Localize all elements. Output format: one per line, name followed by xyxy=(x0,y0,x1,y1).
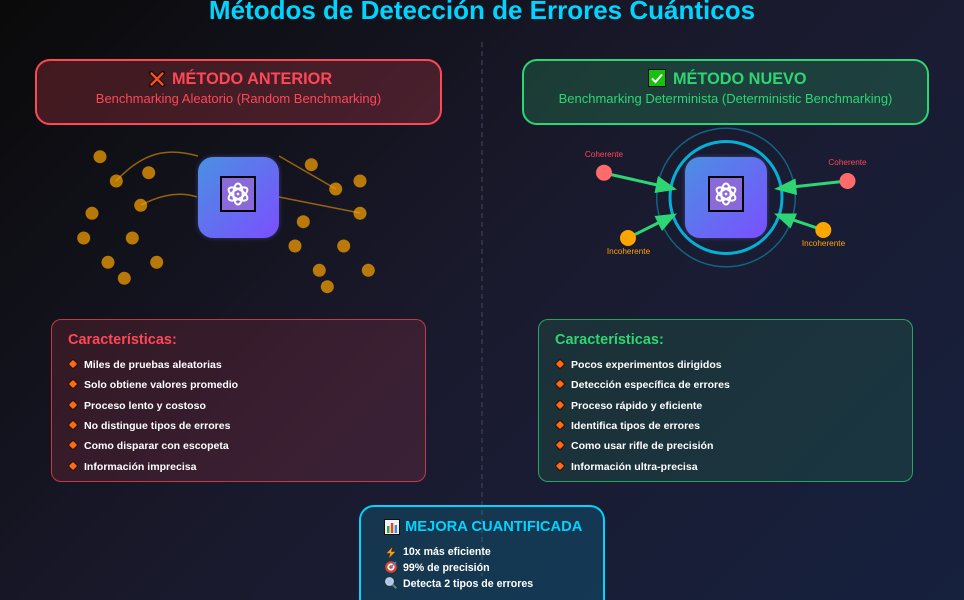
stat: error types: Detecta 2 tipos de errores xyxy=(403,578,533,590)
incoherent error, right xyxy=(802,222,846,248)
outer ring xyxy=(657,128,795,267)
stat: precision: 99% de precisión xyxy=(403,562,490,574)
diagram: rings around the chip xyxy=(656,128,796,268)
stat: efficiency xyxy=(386,546,491,560)
icon: atom xyxy=(220,176,256,212)
diagram: targeted error probes xyxy=(585,150,867,256)
panel: new method characteristics xyxy=(538,319,913,482)
old method subtitle: Benchmarking Aleatorio (Random Benchmarking) xyxy=(96,91,381,106)
coherent error, left: Coherente xyxy=(585,150,624,159)
arrows xyxy=(604,173,847,238)
icon: bar chart xyxy=(384,519,400,535)
icon: magnifier xyxy=(385,577,397,589)
coherent error, left xyxy=(585,150,624,181)
icon: quantum chip, new method xyxy=(685,156,766,238)
list item: Miles de pruebas aleatorias xyxy=(84,358,222,370)
icon: cross xyxy=(148,70,166,88)
new method subtitle: Benchmarking Determinista (Deterministic Benchmarking) xyxy=(559,91,892,106)
panel: old method characteristics xyxy=(51,319,426,482)
characteristics heading: Características: xyxy=(68,332,177,348)
list item: Información ultra-precisa xyxy=(571,460,698,472)
random paths xyxy=(116,152,360,213)
incoherent error, left: Incoherente xyxy=(607,247,651,256)
inner ring xyxy=(670,142,782,254)
list item: Pocos experimentos dirigidos xyxy=(571,358,722,370)
diagram: random benchmarking xyxy=(77,150,375,294)
incoherent error, right: Incoherente xyxy=(802,239,846,248)
list item: Solo obtiene valores promedio xyxy=(84,378,238,390)
list item: Proceso lento y costoso xyxy=(84,400,206,412)
improvement heading: MEJORA CUANTIFICADA xyxy=(405,518,582,534)
stat: efficiency: 10x más eficiente xyxy=(403,546,491,558)
coherent error, right: Coherente xyxy=(828,158,867,167)
icon: quantum chip, old method xyxy=(198,156,279,238)
coherent error, right xyxy=(828,158,867,189)
new method heading: MÉTODO NUEVO xyxy=(673,70,807,88)
list item: No distingue tipos de errores xyxy=(84,420,231,432)
list item: Como usar rifle de precisión xyxy=(571,440,713,452)
icon: check mark xyxy=(648,69,666,87)
incoherent error, left xyxy=(607,230,651,256)
list item: Información imprecisa xyxy=(84,460,197,472)
divider line xyxy=(481,42,483,576)
icon: lightning xyxy=(386,546,396,560)
error dots xyxy=(77,150,375,293)
icon: target xyxy=(385,561,397,573)
list item: Detección específica de errores xyxy=(571,378,730,390)
list item: Como disparar con escopeta xyxy=(84,440,229,452)
list item: Proceso rápido y eficiente xyxy=(571,400,702,412)
icon: atom xyxy=(708,176,744,212)
old method heading: MÉTODO ANTERIOR xyxy=(172,70,332,88)
panel: new method header xyxy=(522,59,929,125)
panel: old method header xyxy=(35,59,442,125)
characteristics heading: Características: xyxy=(555,332,664,348)
panel: quantified improvement xyxy=(359,505,605,600)
list item: Identifica tipos de errores xyxy=(571,420,700,432)
